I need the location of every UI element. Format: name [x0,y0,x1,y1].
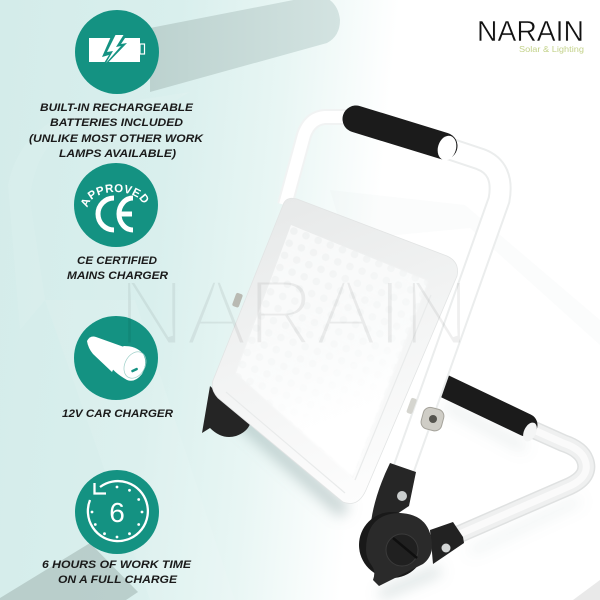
text: work time caption: 6 HOURS OF WORK TIME [42,559,191,571]
panel [212,198,458,504]
feature: CE certified [67,163,169,282]
feature: car charger [62,316,174,420]
handle frame [285,117,500,468]
text: batteries caption: (UNLIKE MOST OTHER WORK [29,133,204,145]
text: CE caption [67,255,169,282]
logo: Narain Solar & Lighting: NARAIN [477,16,584,48]
text: batteries caption [29,102,204,160]
text: batteries caption: LAMPS AVAILABLE) [59,148,176,160]
background ghost band [0,543,138,600]
rear left pivot [202,292,250,437]
lamp shadows [225,405,580,595]
watermark: NARAIN: NARAIN [118,260,470,365]
text: car charger caption: 12V CAR CHARGER [62,408,174,420]
text: work time caption: ON A FULL CHARGE [58,574,177,586]
handle foam grip [356,119,444,146]
icon: battery with lightning bolt [75,10,159,94]
front pivot bracket [359,463,464,586]
text: batteries caption: BUILT-IN RECHARGEABLE [40,102,193,114]
logo: Narain Solar & Lighting: Solar & Lighting [519,44,584,54]
text: CE caption: CE CERTIFIED [77,255,157,267]
text: batteries caption: BATTERIES INCLUDED [50,117,183,129]
connector nut [406,397,445,432]
icon: car charger [74,316,158,400]
icon: six hour clock: 6 [109,497,125,528]
feature: rechargeable batteries [29,10,204,160]
rear stand [440,384,586,536]
product: work lamp [202,117,586,595]
text: work time caption [42,559,191,586]
icon: approved CE badge: APPROVED [81,184,148,208]
background ghost handle [150,0,340,92]
icon: six hour clock [75,470,159,554]
text: CE caption: MAINS CHARGER [67,270,169,282]
feature: work time [42,470,191,586]
rear foam grip [440,384,526,425]
